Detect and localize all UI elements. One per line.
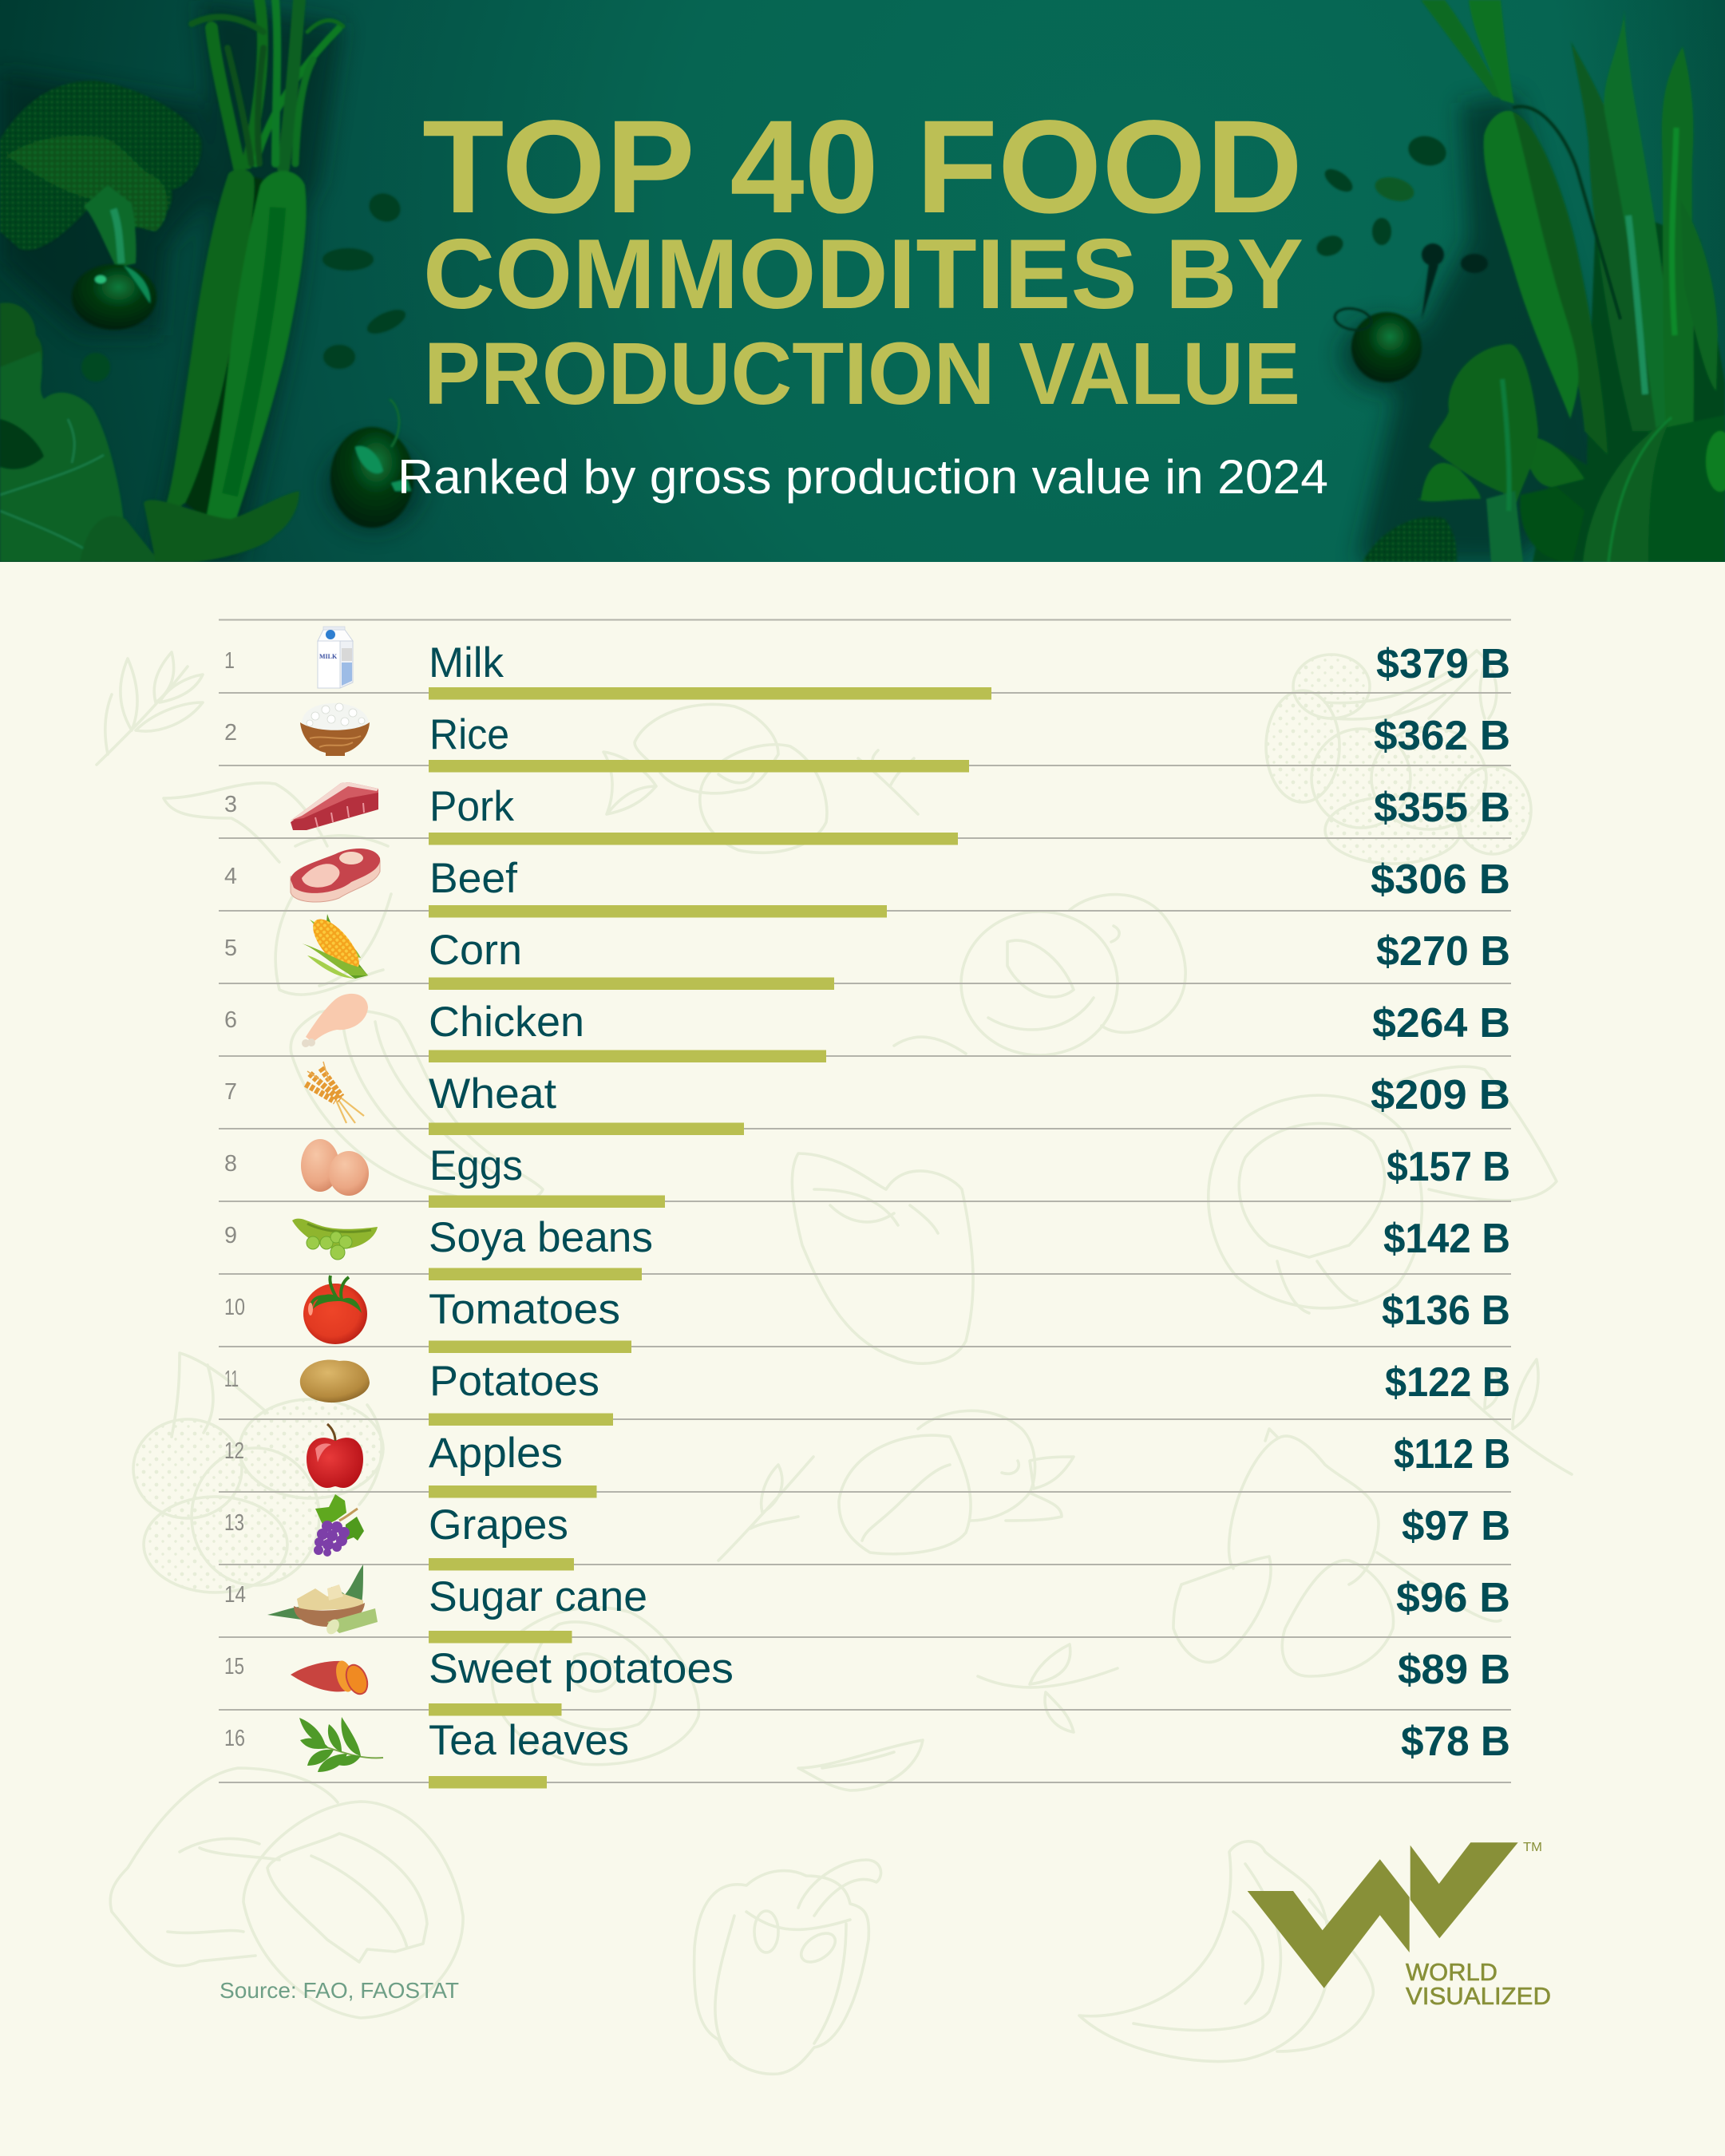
label Beef: Beef <box>429 855 517 902</box>
label Tea leaves: Tea leaves <box>429 1717 629 1764</box>
seeds left <box>81 188 409 382</box>
row 15: Sweet potatoes <box>224 1645 1510 1716</box>
value Corn: $270 B <box>1376 928 1510 975</box>
tall leaves right <box>1571 42 1656 431</box>
dark cherry right <box>1351 312 1422 382</box>
label Rice: Rice <box>429 711 509 758</box>
bar Rice <box>429 760 969 773</box>
carrot right back <box>1513 112 1608 455</box>
right vegetables <box>1314 0 1725 562</box>
icon: soya pod <box>292 1219 378 1260</box>
icon: chicken drumstick <box>302 994 368 1047</box>
bar Wheat <box>429 1122 744 1135</box>
value Pork: $355 B <box>1374 785 1510 831</box>
icon: pork cut <box>291 782 378 830</box>
row 14: Sugar cane <box>224 1565 1510 1643</box>
value Sweet potatoes: $89 B <box>1398 1647 1510 1693</box>
rank 1: 1 <box>224 648 235 674</box>
label Milk: Milk <box>429 639 504 686</box>
icon: tea leaves <box>299 1717 383 1772</box>
carrot left two <box>206 171 307 519</box>
icon: sweet potato <box>291 1659 371 1697</box>
label Soya beans: Soya beans <box>429 1214 653 1261</box>
label Corn: Corn <box>429 927 522 974</box>
mass behind leaves <box>1586 222 1725 517</box>
row 7: Wheat <box>224 1062 1510 1135</box>
label Grapes: Grapes <box>429 1501 568 1549</box>
broccoli <box>0 81 202 250</box>
label Apples: Apples <box>429 1430 563 1477</box>
label Eggs: Eggs <box>429 1142 523 1189</box>
value Tea leaves: $78 B <box>1401 1719 1510 1765</box>
logo wordmark: VISUALIZED <box>1406 1982 1551 2010</box>
rank 3: 3 <box>224 792 237 817</box>
rank 5: 5 <box>224 936 237 961</box>
rank 11: 11 <box>224 1367 239 1392</box>
value Sugar cane: $96 B <box>1396 1575 1510 1621</box>
bar Corn <box>429 977 834 990</box>
icon: tomato <box>303 1276 367 1344</box>
row 11: Potatoes <box>224 1358 1510 1426</box>
bar Grapes <box>429 1558 574 1571</box>
row 8: Eggs <box>224 1139 1510 1208</box>
label Wheat: Wheat <box>429 1070 556 1118</box>
row 5: Corn <box>224 912 1510 990</box>
label Sweet potatoes: Sweet potatoes <box>429 1645 734 1692</box>
trademark: TM <box>1523 1841 1542 1854</box>
leaves left <box>0 303 42 395</box>
icon: rice bowl <box>300 703 370 756</box>
row 4: Beef <box>224 849 1510 918</box>
bar Tomatoes <box>429 1341 631 1353</box>
row 13: Grapes <box>224 1494 1510 1571</box>
value Soya beans: $142 B <box>1383 1216 1510 1262</box>
rank 14: 14 <box>224 1582 246 1608</box>
value Wheat: $209 B <box>1371 1072 1510 1118</box>
label Tomatoes: Tomatoes <box>429 1286 620 1333</box>
gap between carrots <box>185 177 263 519</box>
subtitle: Ranked by gross production value in 2024 <box>398 450 1328 504</box>
rank 13: 13 <box>224 1510 244 1536</box>
header banner <box>0 0 1725 562</box>
row 16: Tea leaves <box>224 1717 1510 1788</box>
rank 6: 6 <box>224 1007 237 1033</box>
icon: corn cob <box>302 912 368 979</box>
bar Tea leaves <box>429 1776 547 1788</box>
source note: Source: FAO, FAOSTAT <box>220 1978 459 2003</box>
row dividers <box>219 619 1511 1782</box>
rank 4: 4 <box>224 864 237 889</box>
rank 2: 2 <box>224 720 237 746</box>
value Potatoes: $122 B <box>1385 1359 1510 1406</box>
pak choi <box>1533 447 1596 562</box>
bar Sweet potatoes <box>429 1703 562 1716</box>
rank 12: 12 <box>224 1438 244 1464</box>
carrot right front <box>1484 111 1578 419</box>
value Grapes: $97 B <box>1402 1503 1510 1549</box>
dark pepper left <box>72 264 156 330</box>
rank 7: 7 <box>224 1079 237 1105</box>
bar Soya beans <box>429 1268 642 1280</box>
icon: potato <box>300 1360 370 1402</box>
row 12: Apples <box>224 1424 1510 1497</box>
vegetable shadows <box>0 0 1612 562</box>
bar Milk <box>429 687 991 699</box>
banner gradient background <box>0 0 1725 562</box>
carrot greens left <box>192 0 343 168</box>
bar Chicken <box>429 1050 826 1062</box>
label Chicken: Chicken <box>429 999 584 1046</box>
value Milk: $379 B <box>1376 641 1510 687</box>
value Rice: $362 B <box>1374 713 1510 759</box>
left vegetables <box>0 0 413 562</box>
value Chicken: $264 B <box>1372 1000 1510 1046</box>
icon: milk carton <box>318 627 353 688</box>
rank 9: 9 <box>224 1223 237 1248</box>
row 6: Chicken <box>224 994 1510 1062</box>
icon: sugar bowl and cane <box>267 1565 378 1636</box>
value Eggs: $157 B <box>1387 1144 1510 1190</box>
World Visualized logo <box>1248 1841 1551 2010</box>
value Apples: $112 B <box>1394 1431 1510 1478</box>
title line 2: COMMODITIES BY <box>423 220 1304 330</box>
value Beef: $306 B <box>1371 856 1510 903</box>
carrot left one <box>160 169 255 520</box>
row 1: Milk <box>224 627 1510 699</box>
carrot stems right <box>1421 0 1505 100</box>
row 9: Soya beans <box>224 1214 1510 1280</box>
rank 10: 10 <box>224 1295 245 1320</box>
icon: apple <box>307 1424 363 1488</box>
value Tomatoes: $136 B <box>1382 1288 1510 1334</box>
bar Pork <box>429 833 958 845</box>
label Sugar cane: Sugar cane <box>429 1573 647 1620</box>
icon: beef steak <box>291 849 380 902</box>
icon: grapes <box>314 1494 364 1557</box>
icon: wheat sheaf <box>306 1062 364 1123</box>
label Pork: Pork <box>429 783 514 830</box>
label Potatoes: Potatoes <box>429 1358 599 1405</box>
background food sketches <box>97 651 1572 2074</box>
icon: eggs <box>301 1139 369 1196</box>
ranking table <box>219 619 1511 1788</box>
logo mark <box>1248 1842 1518 1988</box>
rank 16: 16 <box>224 1726 245 1751</box>
rank 15: 15 <box>224 1654 244 1679</box>
row 2: Rice <box>224 703 1510 773</box>
row 10: Tomatoes <box>224 1276 1510 1353</box>
pepper lower centre <box>330 427 413 528</box>
logo wordmark <box>1406 1958 1551 2010</box>
title line 1: TOP 40 FOOD <box>422 93 1303 241</box>
icon: milk carton: MILK <box>319 653 338 660</box>
row 3: Pork <box>224 782 1510 845</box>
bar Beef <box>429 905 887 918</box>
bar Eggs <box>429 1196 665 1208</box>
title line 3: PRODUCTION VALUE <box>424 325 1300 423</box>
bar Sugar cane <box>429 1631 572 1643</box>
logo wordmark: WORLD <box>1406 1958 1498 1986</box>
bar Apples <box>429 1485 597 1497</box>
bar Potatoes <box>429 1413 613 1426</box>
seeds right <box>1314 132 1488 319</box>
rank 8: 8 <box>224 1151 237 1177</box>
